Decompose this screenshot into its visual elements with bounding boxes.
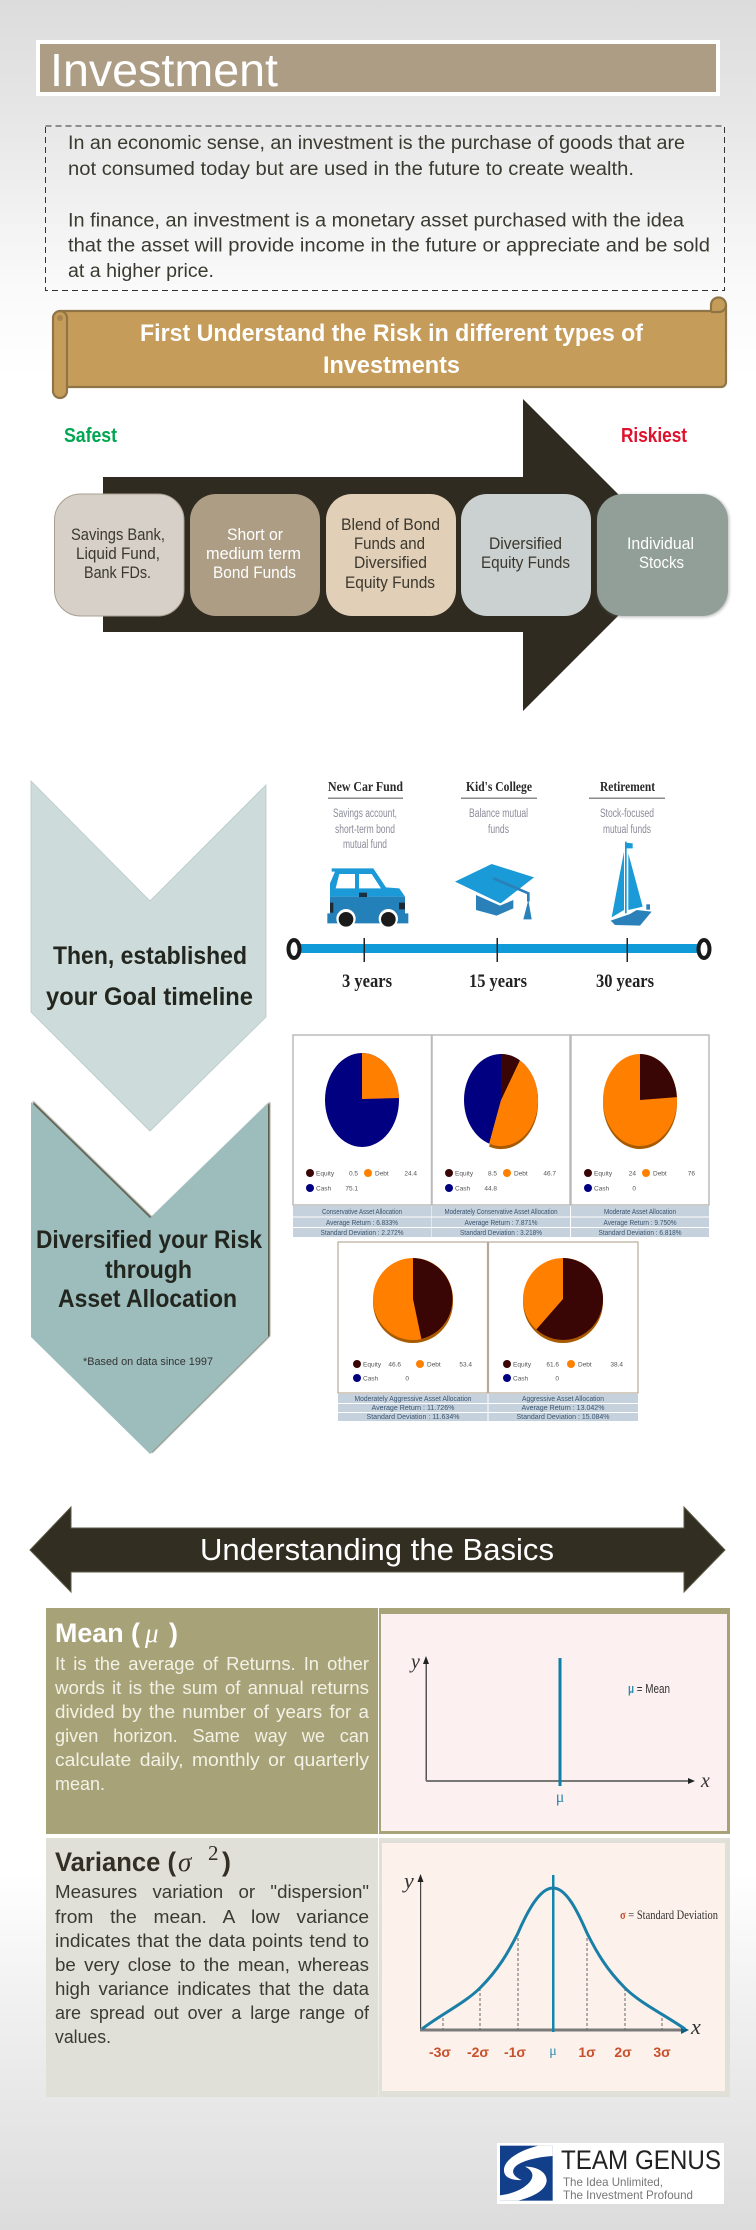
pie panel: conservative: 24.4 xyxy=(404,1170,417,1178)
panel: variance text: 2 xyxy=(208,1841,218,1865)
logo: team genus: The Idea Unlimited, xyxy=(563,2175,663,2189)
pie panel: moderately aggressive: Moderately Aggressive Asset Allocation xyxy=(354,1394,472,1403)
pie panel: aggressive: 0 xyxy=(555,1376,559,1382)
panel: variance text: are spread out over a large range of xyxy=(55,2002,370,2023)
text block: investment definitions xyxy=(46,126,724,290)
panel: variance text xyxy=(46,1838,378,2097)
logo: team genus: TEAM GENUS xyxy=(561,2145,721,2175)
icon: graduation cap xyxy=(455,864,534,919)
panel: mean text: μ xyxy=(144,1618,159,1648)
panel: variance text: ) xyxy=(222,1847,231,1877)
goal: new car fund: short-term bond xyxy=(335,824,395,836)
panel: variance text: from the mean. A low variance xyxy=(55,1906,369,1927)
panel: variance text: high variance indicates that the data xyxy=(55,1978,370,1999)
pie panel: moderate: Debt xyxy=(653,1170,667,1178)
panel: mean chart xyxy=(379,1608,730,1834)
goal: retirement: Stock-focused xyxy=(600,808,654,820)
panel: variance chart: -3σ xyxy=(429,2044,451,2060)
risk box: savings xyxy=(54,494,184,616)
pie panel: moderate: 24 xyxy=(629,1170,636,1178)
goal timeline chart xyxy=(288,780,710,992)
pie panel: moderately aggressive: Cash xyxy=(363,1376,379,1382)
panel: variance text: σ xyxy=(178,1847,193,1877)
risk box: blend: Blend of Bond xyxy=(341,515,440,534)
risk box: stocks: Stocks xyxy=(639,553,684,572)
chevron: asset allocation: Diversified your Risk xyxy=(36,1226,262,1254)
pie panel: aggressive: Cash xyxy=(513,1376,529,1382)
panel: variance chart: 2σ xyxy=(614,2044,632,2060)
icon: car xyxy=(327,868,408,928)
panel: variance chart: σ = Standard Deviation xyxy=(620,1907,718,1922)
goal: retirement: Retirement xyxy=(600,780,655,795)
pie panel: moderately aggressive: Equity xyxy=(363,1362,382,1368)
logo: team genus xyxy=(497,2143,724,2204)
pie panel: moderately aggressive: 46.6 xyxy=(388,1362,401,1368)
risk box: blend: Equity Funds xyxy=(345,573,435,592)
pie panel: moderate: Moderate Asset Allocation xyxy=(604,1207,676,1216)
pie panel: conservative: 0.5 xyxy=(349,1170,358,1178)
label: riskiest: Riskiest xyxy=(621,425,687,447)
chevron: goal timeline: Then, established xyxy=(53,942,247,970)
panel: mean chart: μ xyxy=(556,1789,564,1806)
risk box: stocks xyxy=(597,494,729,617)
chevron: goal timeline: your Goal timeline xyxy=(46,983,253,1011)
panel: mean chart: y xyxy=(409,1651,420,1673)
panel: variance chart: 1σ xyxy=(578,2044,596,2060)
risk box: equity funds: Equity Funds xyxy=(481,553,570,572)
risk box: blend xyxy=(326,494,456,616)
title: Investment xyxy=(50,44,278,96)
panel: mean text xyxy=(46,1608,378,1834)
panel: mean text: mean. xyxy=(55,1773,105,1794)
risk box: blend: Diversified xyxy=(354,553,427,572)
pie panel: conservative: Average Return : 6.833% xyxy=(326,1218,398,1227)
label: safest: Safest xyxy=(64,425,117,447)
pie panel: moderate: Standard Deviation : 6.818% xyxy=(598,1228,682,1237)
pie panel: moderately conservative: Cash xyxy=(455,1186,471,1192)
timeline labels xyxy=(342,971,654,992)
panel: variance text: be very close to the mean, whereas xyxy=(55,1954,369,1975)
goal: kid's college xyxy=(461,780,537,836)
panel: variance chart: x xyxy=(690,2014,701,2039)
scroll banner heading: First Understand the Risk in different types of xyxy=(140,320,644,347)
panel: variance text: values. xyxy=(55,2026,111,2047)
pie chart xyxy=(603,1054,677,1149)
panel: mean chart: x xyxy=(700,1770,710,1792)
pie panel: conservative xyxy=(293,1035,432,1237)
pie panel: moderate: 0 xyxy=(632,1186,636,1192)
risk box: bond funds: medium term xyxy=(206,544,301,563)
pie panel: aggressive xyxy=(488,1242,638,1421)
pie panel: moderately conservative: 8.5 xyxy=(488,1170,497,1178)
panel: mean text: divided by the number of years for a xyxy=(55,1701,370,1722)
panel: mean text: words it is the sum of annual returns xyxy=(54,1677,369,1698)
risk box: bond funds: Bond Funds xyxy=(213,563,296,582)
pie panel: moderately conservative: 44.8 xyxy=(484,1186,497,1192)
panel: mean text: It is the average of Returns. In other xyxy=(55,1653,369,1674)
pie panel: moderately aggressive: Average Return : 11.726% xyxy=(372,1403,455,1412)
pie panel: moderate: Equity xyxy=(594,1170,613,1178)
pie panel: aggressive: Equity xyxy=(513,1362,532,1368)
panel: variance chart: -2σ xyxy=(467,2044,489,2060)
panel: variance chart: μ xyxy=(549,2044,557,2059)
panel: variance chart: 3σ xyxy=(653,2044,671,2060)
scroll banner heading: Investments xyxy=(323,352,460,379)
pie panel: moderately conservative xyxy=(432,1035,570,1237)
pie panel: moderate xyxy=(571,1035,709,1237)
pie panel: conservative: Cash xyxy=(316,1186,332,1192)
pie panel: moderately aggressive xyxy=(338,1242,488,1421)
panel: mean text: ) xyxy=(169,1618,178,1648)
title xyxy=(36,40,720,96)
icon: sailboat xyxy=(611,842,652,926)
pie panel: moderately aggressive: 53.4 xyxy=(459,1362,472,1368)
pie panel: moderately conservative: Equity xyxy=(455,1170,474,1178)
panel: mean text: calculate daily, monthly or quarterly xyxy=(55,1749,370,1770)
pie panel: moderately aggressive: Debt xyxy=(427,1362,441,1368)
pie panel: aggressive: Aggressive Asset Allocation xyxy=(522,1394,604,1403)
pie panel: moderately conservative: Standard Deviation : 3.218% xyxy=(460,1228,542,1237)
pie panel: moderate: Average Return : 9.750% xyxy=(604,1218,677,1227)
logo: team genus: The Investment Profound xyxy=(563,2188,693,2202)
pie panel: conservative: 75.1 xyxy=(345,1186,358,1192)
panel: variance text: Measures variation or "dispersion" xyxy=(55,1881,369,1902)
goal: kid's college: funds xyxy=(488,824,509,836)
panel: mean text: Mean ( xyxy=(55,1618,140,1648)
pie panel: aggressive: 38.4 xyxy=(610,1362,623,1368)
pie panel: aggressive: 61.6 xyxy=(546,1362,559,1368)
timeline labels: 15 years xyxy=(469,971,527,992)
risk box: equity funds: Diversified xyxy=(489,534,562,553)
panel: variance chart: -1σ xyxy=(504,2044,526,2060)
pie chart xyxy=(464,1054,538,1149)
pie panel: moderately aggressive: 0 xyxy=(405,1376,409,1382)
chevron: asset allocation: Asset Allocation xyxy=(58,1285,237,1313)
pie panel: conservative: Debt xyxy=(375,1170,389,1178)
goal: new car fund: Savings account, xyxy=(333,808,397,820)
chevron: goal timeline xyxy=(31,781,266,1131)
goal: kid's college: Balance mutual xyxy=(469,808,528,820)
panel: variance chart xyxy=(379,1838,730,2097)
scroll banner heading xyxy=(53,298,726,398)
heading arrow: understanding the basics xyxy=(30,1507,725,1592)
chevron: asset allocation: *Based on data since 1997 xyxy=(83,1356,213,1368)
chevron: asset allocation xyxy=(31,1101,270,1454)
timeline labels: 3 years xyxy=(342,971,392,992)
panel: mean chart: μ = Mean xyxy=(628,1681,670,1696)
goal: new car fund: mutual fund xyxy=(343,839,387,851)
pie chart xyxy=(373,1258,453,1343)
risk box: savings: Savings Bank, xyxy=(71,525,165,544)
risk box: savings: Bank FDs. xyxy=(84,563,151,582)
panel: mean text: given horizon. Same way we can xyxy=(55,1725,369,1746)
timeline labels: 30 years xyxy=(596,971,654,992)
goal: retirement xyxy=(589,780,665,836)
goal: new car fund xyxy=(328,780,403,851)
risk box: bond funds xyxy=(190,494,320,616)
risk box: bond funds: Short or xyxy=(227,525,283,544)
pie chart xyxy=(523,1258,603,1343)
chevron: asset allocation: through xyxy=(105,1256,192,1284)
risk box: blend: Funds and xyxy=(354,534,425,553)
text block: investment definitions: not consumed today but are used in the future to create wealth. xyxy=(68,159,634,180)
risk box: stocks: Individual xyxy=(627,534,694,553)
panel: variance text: indicates that the data points tend to xyxy=(55,1930,369,1951)
goal: retirement: mutual funds xyxy=(603,824,651,836)
risk box: savings: Liquid Fund, xyxy=(76,544,160,563)
pie panel: moderate: 76 xyxy=(688,1170,695,1178)
pie panel: aggressive: Standard Deviation : 15.084% xyxy=(516,1412,610,1421)
risk arrow xyxy=(103,399,679,711)
pie panel: moderately aggressive: Standard Deviation : 11.634% xyxy=(366,1412,460,1421)
pie panel: moderately conservative: Moderately Conservative Asset Allocation xyxy=(444,1207,558,1216)
risk box: equity funds xyxy=(461,494,591,616)
text block: investment definitions: In an economic sense, an investment is the purchase of goods that are xyxy=(68,133,685,154)
goal: new car fund: New Car Fund xyxy=(328,780,403,795)
pie panel: conservative: Conservative Asset Allocation xyxy=(322,1207,402,1216)
pie panel: conservative: Standard Deviation : 2.272% xyxy=(320,1228,404,1237)
pie chart xyxy=(325,1053,399,1147)
timeline bar xyxy=(288,938,710,962)
pie panel: moderately conservative: Debt xyxy=(514,1170,528,1178)
text block: investment definitions: that the asset will provide income in the future or appreciate and be sold xyxy=(68,236,710,256)
pie panel: conservative: Equity xyxy=(316,1170,335,1178)
pie panel: aggressive: Debt xyxy=(578,1362,592,1368)
goal: kid's college: Kid's College xyxy=(466,780,532,795)
text block: investment definitions: In finance, an investment is a monetary asset purchased with the idea xyxy=(68,210,684,232)
icon: swirl mark xyxy=(500,2146,553,2201)
pie panel: moderately conservative: 46.7 xyxy=(543,1170,556,1178)
pie panel: aggressive: Average Return : 13.042% xyxy=(522,1403,605,1412)
panel: variance text: Variance ( xyxy=(55,1847,176,1877)
pie panel: moderate: Cash xyxy=(594,1186,610,1192)
text block: investment definitions: at a higher price. xyxy=(68,261,214,282)
heading arrow: understanding the basics: Understanding the Basics xyxy=(200,1532,554,1567)
panel: variance chart: y xyxy=(402,1868,414,1893)
pie panel: moderately conservative: Average Return : 7.871% xyxy=(464,1218,538,1227)
